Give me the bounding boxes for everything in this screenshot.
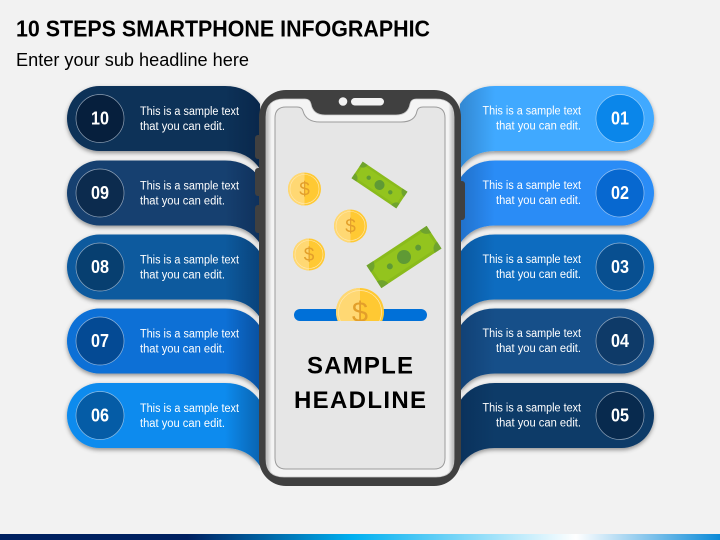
sample headline: HEADLINE (294, 387, 426, 414)
coin 2 (334, 210, 367, 242)
sample headline: SAMPLE (307, 352, 413, 380)
step 09 panel (67, 160, 260, 244)
phone body (259, 90, 461, 486)
banknote 1 (352, 162, 407, 208)
step 09 text: This is a sample text (140, 180, 240, 192)
step 01 text: that you can edit. (496, 120, 581, 132)
step 07 number badge (76, 317, 124, 365)
step 03 text: that you can edit. (496, 269, 581, 281)
step 06 text: This is a sample text (140, 403, 240, 415)
step 05 panel (460, 383, 654, 466)
step 02 text: that you can edit. (496, 195, 581, 207)
step 06 panel (67, 383, 260, 466)
step 04 text: that you can edit. (496, 343, 581, 355)
step 10 panel (67, 86, 260, 169)
step 04 number badge (596, 317, 644, 365)
step 03 number badge: 03 (611, 257, 629, 277)
phone screen (275, 107, 445, 469)
step 02 number badge: 02 (611, 183, 629, 203)
step 06 number badge: 06 (91, 406, 109, 426)
subtitle: Enter your sub headline here (16, 50, 249, 70)
coin 1 (288, 172, 321, 206)
step 05 text: This is a sample text (482, 402, 582, 414)
step 06 text: that you can edit. (140, 418, 225, 430)
bottom gradient bar (0, 534, 720, 540)
step 05 text: that you can edit. (496, 418, 581, 430)
step 10 number badge: 10 (91, 108, 109, 128)
phone side buttons (255, 135, 465, 233)
step 03 number badge (596, 243, 644, 291)
coin 3: $ (304, 245, 315, 266)
step 10 text: This is a sample text (140, 106, 240, 118)
coin 3 (293, 238, 325, 270)
coin 2: $ (345, 216, 356, 238)
step 01 text: This is a sample text (482, 106, 582, 118)
camera (339, 97, 347, 106)
step 09 text: that you can edit. (140, 196, 225, 208)
step 02 text: This is a sample text (482, 180, 582, 192)
smartphone (255, 90, 465, 486)
step 05 number badge: 05 (611, 406, 629, 426)
step 01 number badge (596, 94, 644, 142)
step 07 number badge: 07 (91, 331, 109, 351)
sample headline (294, 352, 426, 414)
title: 10 STEPS SMARTPHONE INFOGRAPHIC (16, 16, 430, 42)
step 04 text: This is a sample text (482, 328, 582, 340)
step 08 number badge: 08 (91, 257, 109, 277)
step 08 text: This is a sample text (140, 254, 240, 266)
step 07 panel (67, 308, 260, 392)
step 08 panel (67, 234, 260, 318)
step 03 text: This is a sample text (482, 254, 582, 266)
step 08 number badge (76, 243, 124, 291)
coin entering slot: $ (352, 297, 368, 329)
step 02 number badge (596, 169, 644, 217)
step 02 panel (460, 160, 654, 244)
step 06 number badge (76, 392, 124, 440)
speaker (351, 98, 384, 106)
step 10 text: that you can edit. (140, 121, 225, 133)
banknote 2 (367, 226, 441, 288)
step 07 text: that you can edit. (140, 344, 225, 356)
phone bezel (266, 99, 454, 477)
coin 1: $ (299, 180, 310, 200)
step 09 number badge (76, 169, 124, 217)
step 01 number badge: 01 (611, 108, 629, 128)
step 10 number badge (76, 94, 124, 142)
step 03 panel (460, 234, 654, 318)
step 04 panel (460, 308, 654, 392)
step 05 number badge (596, 392, 644, 440)
step 07 text: This is a sample text (140, 328, 240, 340)
step 01 panel (460, 86, 654, 169)
step 04 number badge: 04 (611, 331, 629, 351)
step 08 text: that you can edit. (140, 270, 225, 282)
step 09 number badge: 09 (91, 183, 109, 203)
coin entering slot (336, 288, 384, 321)
coin slot (294, 309, 427, 321)
